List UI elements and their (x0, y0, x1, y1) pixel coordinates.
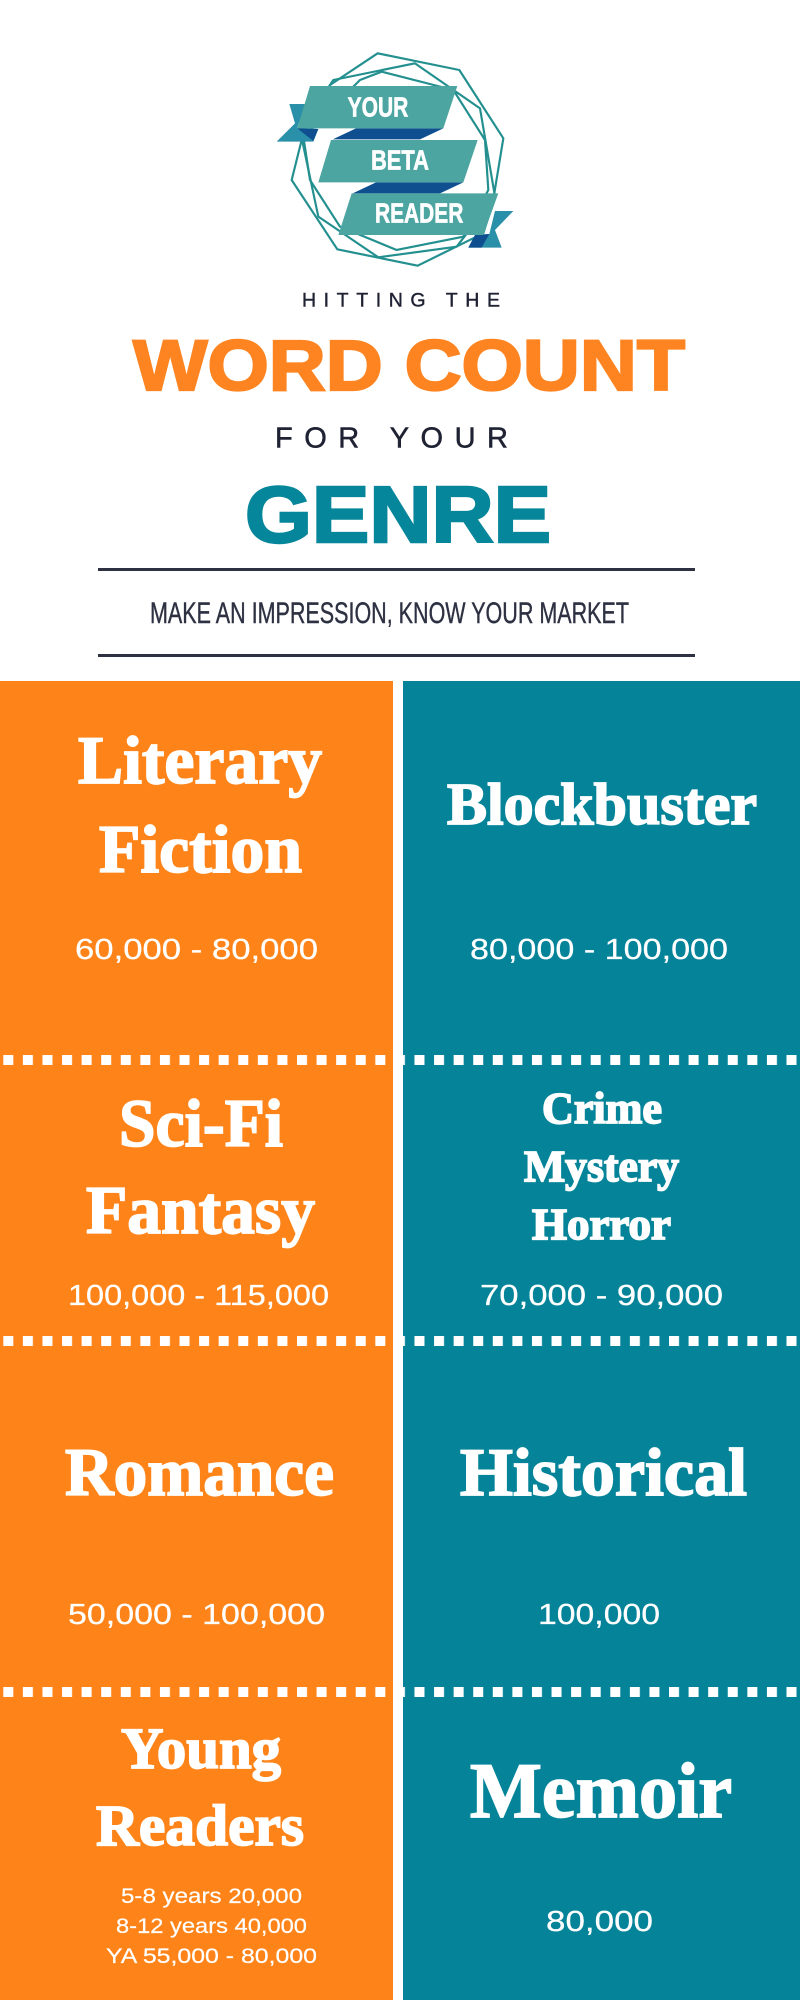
panel: Young Readers: YA 55,000 - 80,000 (106, 1945, 317, 1968)
panel: Young Readers: 5-8 years 20,000 (121, 1885, 302, 1908)
panel: Literary Fiction: Fiction (99, 811, 302, 887)
panel: Romance: Romance (65, 1434, 334, 1510)
heading: hitting the: HITTING THE (302, 290, 500, 312)
panel: Sci-Fi Fantasy (68, 1085, 329, 1312)
logo: ribbon YOUR: YOUR (348, 92, 408, 123)
panel: Crime Mystery Horror: Mystery (524, 1142, 679, 1191)
panel: Historical (460, 1434, 747, 1631)
panel: Blockbuster: 80,000 - 100,000 (470, 934, 728, 966)
panel: Crime Mystery Horror: Crime (542, 1084, 662, 1133)
panel: Young Readers: Young (121, 1716, 281, 1781)
panel: Young Readers (96, 1716, 317, 1968)
heading: for your: FOR YOUR (275, 422, 508, 454)
panel: teal column background (403, 681, 800, 2000)
panel: Historical: Historical (460, 1434, 747, 1510)
panel: Historical: 100,000 (538, 1599, 660, 1631)
panel: Sci-Fi Fantasy: Sci-Fi (119, 1085, 283, 1161)
panel: Memoir: 80,000 (546, 1906, 653, 1938)
tagline: MAKE AN IMPRESSION, KNOW YOUR MARKET (150, 597, 629, 630)
logo: ribbon BETA: BETA (371, 144, 429, 175)
logo: ribbon BETA (318, 140, 478, 182)
panel: Blockbuster (447, 771, 757, 966)
panel: Young Readers: 8-12 years 40,000 (116, 1915, 307, 1938)
logo: geometric polygon frame (292, 53, 503, 266)
panel: Sci-Fi Fantasy: Fantasy (86, 1172, 315, 1248)
logo: right ribbon tail (468, 211, 513, 248)
panel: Memoir (470, 1747, 732, 1938)
panel: Romance: 50,000 - 100,000 (68, 1599, 325, 1631)
logo: ribbon READER (338, 193, 498, 235)
panel: Young Readers: Readers (96, 1793, 304, 1858)
panel: Blockbuster: Blockbuster (447, 771, 757, 837)
logo: ribbon READER: READER (375, 197, 463, 228)
panel: Literary Fiction: Literary (78, 722, 322, 798)
panel: Sci-Fi Fantasy: 100,000 - 115,000 (68, 1280, 329, 1312)
panel: Literary Fiction (75, 722, 322, 966)
logo: left ribbon tail (277, 104, 318, 142)
panel: Literary Fiction: 60,000 - 80,000 (75, 934, 318, 966)
heading: genre: GENRE (245, 470, 551, 559)
panel: Crime Mystery Horror: 70,000 - 90,000 (480, 1280, 723, 1312)
panel: Romance (65, 1434, 334, 1631)
panel: Crime Mystery Horror: Horror (532, 1200, 671, 1249)
heading: word count: WORD COUNT (133, 327, 685, 406)
logo: ribbon YOUR (297, 86, 457, 128)
panel: Memoir: Memoir (470, 1747, 732, 1834)
panel: Crime Mystery Horror (480, 1084, 723, 1312)
panel: orange column background (0, 681, 393, 2000)
logo: ribbon folds (333, 128, 463, 193)
logo: Your Beta Reader badge (277, 53, 513, 266)
